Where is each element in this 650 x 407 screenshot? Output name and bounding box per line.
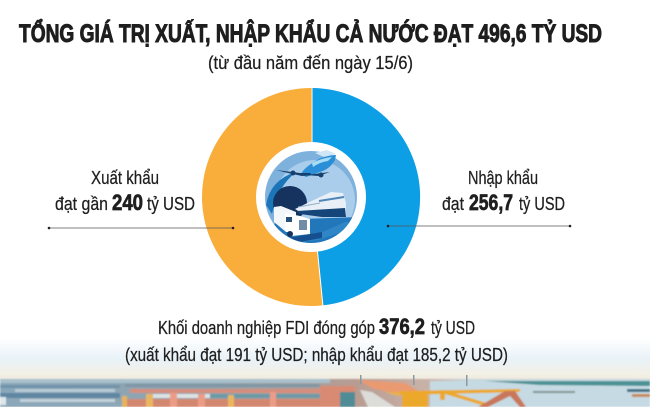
icon: transport xyxy=(256,142,366,252)
segment: export xyxy=(202,88,322,306)
callout: import: tỷ USD xyxy=(519,194,565,214)
subtitle: (từ đầu năm đến ngày 15/6) xyxy=(208,53,413,73)
callout: import xyxy=(387,168,571,227)
callout: export: đạt gần xyxy=(55,194,108,214)
text: FDI contribution: 376,2 xyxy=(379,314,425,339)
callout: import: 256,7 xyxy=(469,190,513,215)
text: FDI contribution xyxy=(158,314,475,339)
callout: import: đạt xyxy=(442,194,464,214)
plane xyxy=(276,150,336,178)
callout: export xyxy=(48,168,234,229)
sky panel xyxy=(280,160,355,219)
background: sky gradient xyxy=(0,338,650,380)
train xyxy=(295,192,346,216)
truck xyxy=(274,206,296,232)
ground xyxy=(274,217,352,243)
tunnel xyxy=(273,186,307,216)
bridge pylons xyxy=(360,375,468,386)
donut chart xyxy=(202,88,420,306)
text: FDI contribution: tỷ USD xyxy=(431,318,475,338)
segment: import xyxy=(312,88,420,305)
callout: import: Nhập khẩu xyxy=(468,168,538,188)
text: FDI contribution: Khối doanh nghiệp FDI đóng góp xyxy=(158,318,375,338)
road shadow xyxy=(300,222,350,242)
callout: export: tỷ USD xyxy=(147,194,195,214)
callout: export: 240 xyxy=(112,190,143,215)
text: FDI breakdown: (xuất khẩu đạt 191 tỷ USD; nhập khẩu đạt 185,2 tỷ USD) xyxy=(125,345,508,365)
callout: export: Xuất khẩu xyxy=(91,168,159,188)
background: port photo xyxy=(0,379,650,407)
swoosh xyxy=(266,172,296,214)
